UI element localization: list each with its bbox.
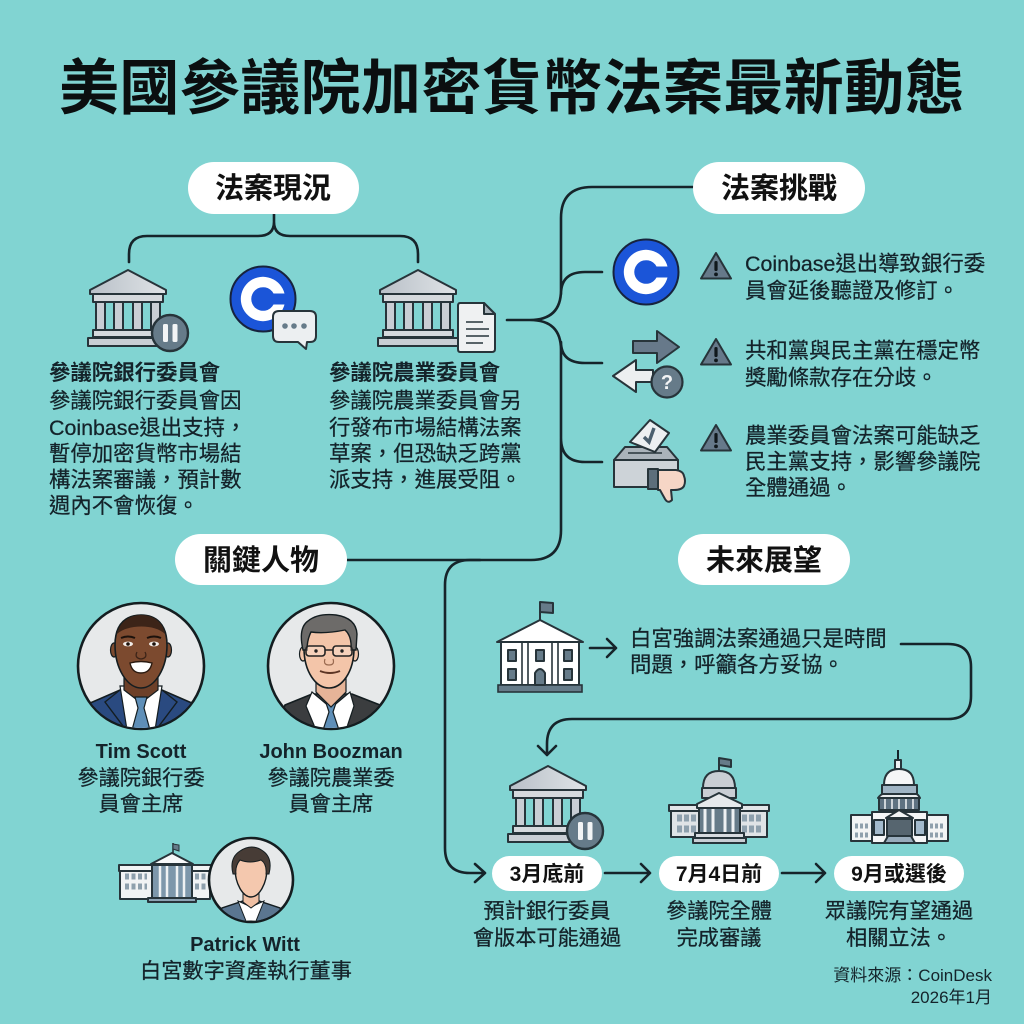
caption: September: 相關立法。 [846,926,952,950]
icon: capitol building [851,750,948,843]
icon: opposing arrows with question [613,331,682,398]
date pill: 7月4日前: 7月4日前 [676,863,762,886]
source note: 2026年1月 [911,988,992,1007]
text block: agriculture committee: 參議院農業委員會另 [329,389,522,413]
caption: September [825,899,973,950]
connector lines: status bracket [129,214,418,262]
icon: coinbase [614,240,678,304]
label: Tim Scott: 員會主席 [99,792,183,816]
icon: agriculture committee building with document [378,270,495,352]
text: challenge 2: 獎勵條款存在分歧。 [745,366,938,390]
date pill: 7月4日前 [659,856,779,891]
text block: banking committee: 構法案審議，預計數 [49,468,242,492]
source note: 資料來源：CoinDesk [833,966,992,985]
label: Tim Scott: Tim Scott [96,741,187,763]
date pill: 9月或選後 [834,856,964,891]
label: Patrick Witt [140,934,352,983]
arrow: pill 2 to 3 [782,864,825,882]
date pill: 3月底前: 3月底前 [510,862,584,886]
label: Tim Scott: 參議院銀行委 [77,766,205,790]
label: John Boozman: John Boozman [259,741,403,763]
caption: March: 會版本可能通過 [473,926,621,950]
text block: agriculture committee: 草案，但恐缺乏跨黨 [329,442,522,466]
heading pill: 法案挑戰 [693,162,865,214]
connector line: key people to timeline [445,560,485,882]
portrait: Patrick Witt [209,838,293,925]
title: 美國參議院加密貨幣法案最新動態 [59,55,965,122]
caption: July [666,899,772,950]
text: challenge 3 [745,424,980,500]
heading pill: 關鍵人物: 關鍵人物 [203,544,319,577]
label: Tim Scott [77,741,205,816]
icon: warning 3 [701,425,731,450]
icon: opposing arrows with question: ? [661,372,673,394]
icon: ballot box with thumbs down [614,420,685,502]
text: challenge 1: Coinbase退出導致銀行委 [745,252,985,276]
caption: September: 眾議院有望通過 [825,899,973,923]
portrait: Tim Scott [78,603,204,735]
portrait: John Boozman [268,603,394,735]
label: Patrick Witt: Patrick Witt [190,934,300,956]
label: John Boozman: 參議院農業委 [267,766,395,790]
text: challenge 2: 共和黨與民主黨在穩定幣 [745,339,980,363]
label: John Boozman [259,741,403,816]
date pill: 9月或選後: 9月或選後 [851,862,947,886]
date pill: 3月底前 [492,856,602,891]
arrow: white house to text [590,639,616,657]
icon: warning 1 [701,253,731,278]
icon: White House behind Patrick Witt [119,843,211,902]
text: white house statement: 問題，呼籲各方妥協。 [630,653,844,677]
heading pill: 未來展望 [678,534,850,585]
text: challenge 2 [745,339,980,390]
text block: banking committee [49,360,246,518]
icon: banking committee paused (timeline) [508,766,603,849]
caption: July: 完成審議 [677,926,761,950]
text block: banking committee: 參議院銀行委員會因 [49,389,242,413]
connector lines: challenges tree [347,187,693,560]
icon: senate building [669,758,769,843]
text: white house statement [630,627,887,677]
source note [833,966,992,1007]
text: challenge 3: 民主黨支持，影響參議院 [745,450,980,474]
text block: agriculture committee: 派支持，進展受阻。 [329,468,522,492]
icon: white house building [497,602,583,692]
heading pill: 關鍵人物 [175,534,347,585]
label: Patrick Witt: 白宮數字資產執行董事 [140,959,352,983]
icon: banking committee building paused [88,270,188,351]
text block: agriculture committee: 參議院農業委員會 [329,360,501,385]
text block: agriculture committee [329,360,522,492]
text block: banking committee: 暫停加密貨幣市場結 [49,442,242,466]
label: John Boozman: 員會主席 [289,792,373,816]
caption: March [473,899,621,950]
icon: coinbase with speech bubble [230,266,316,349]
caption: March: 預計銀行委員 [483,899,611,923]
text block: agriculture committee: 行發布市場結構法案 [329,416,522,440]
arrow: statement to timeline [538,644,971,755]
text: challenge 3: 農業委員會法案可能缺乏 [745,424,980,448]
text: challenge 1 [745,252,985,303]
text: white house statement: 白宮強調法案通過只是時間 [630,627,887,651]
text: challenge 1: 員會延後聽證及修訂。 [745,279,959,303]
text: challenge 3: 全體通過。 [745,476,852,500]
caption: July: 參議院全體 [666,899,772,923]
text block: banking committee: 參議院銀行委員會 [49,360,221,385]
heading pill: 未來展望: 未來展望 [706,544,822,577]
text block: banking committee: Coinbase退出支持， [49,416,246,440]
heading pill: 法案現況: 法案現況 [215,172,331,205]
arrow: pill 1 to 2 [605,864,650,882]
icon: warning 2 [701,339,731,364]
heading pill: 法案現況 [188,162,359,214]
text block: banking committee: 週內不會恢復。 [49,494,199,518]
heading pill: 法案挑戰: 法案挑戰 [721,172,837,205]
